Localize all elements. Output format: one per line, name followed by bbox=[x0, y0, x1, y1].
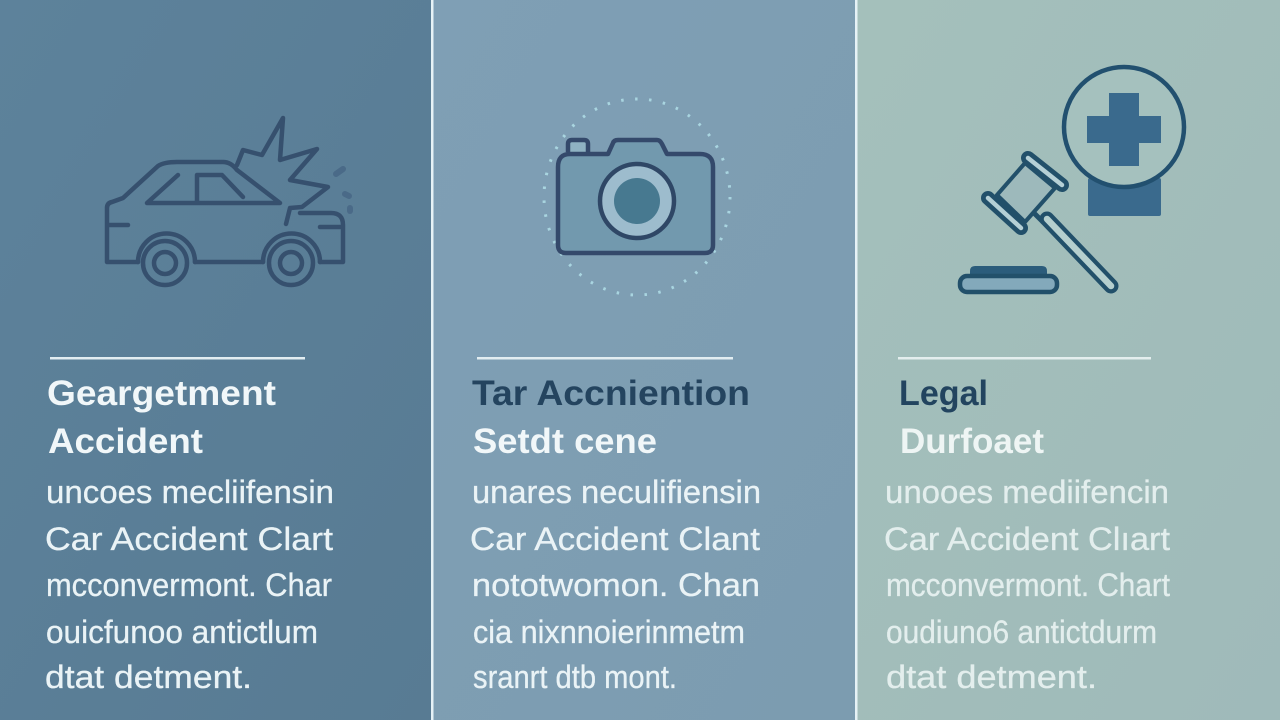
rule bbox=[477, 357, 733, 360]
body text: car accident: mcconvermont. Char bbox=[46, 567, 332, 603]
icon: camera bbox=[544, 99, 730, 295]
body text: accident scene: Car Accident Clant bbox=[470, 521, 760, 557]
panel: accident scene bbox=[432, 0, 856, 720]
heading: accident scene: Tar Accniention bbox=[472, 374, 750, 413]
panel dividers bbox=[431, 0, 858, 720]
body text: car accident: Car Accident Clart bbox=[45, 521, 333, 557]
body text: accident scene: cia nixnnoierinmetm bbox=[473, 614, 745, 650]
panel: legal bbox=[856, 0, 1280, 720]
body text: legal: mcconvermont. Chart bbox=[886, 567, 1170, 603]
heading: accident scene: Setdt cene bbox=[473, 422, 657, 461]
body text: accident scene: nototwomon. Chan bbox=[472, 567, 760, 603]
heading: car accident: Accident bbox=[48, 422, 203, 461]
body text: legal: Car Accident Clıart bbox=[884, 521, 1170, 557]
heading: legal: Durfoaet bbox=[900, 422, 1044, 461]
body text: legal bbox=[884, 474, 1170, 695]
panel: car accident bbox=[0, 0, 432, 720]
body text: accident scene: unares neculifiensin bbox=[472, 474, 761, 510]
body text: legal: unooes mediifencin bbox=[885, 474, 1169, 510]
heading: accident scene bbox=[472, 374, 750, 461]
body text: car accident: uncoes mecliifensin bbox=[46, 474, 334, 510]
body text: accident scene bbox=[470, 474, 761, 695]
body text: car accident: ouicfunoo antictlum bbox=[46, 614, 318, 650]
body text: car accident: dtat detment. bbox=[45, 659, 252, 695]
icon: gavel and medical cross bbox=[960, 67, 1184, 292]
heading: car accident: Geargetment bbox=[47, 374, 276, 413]
body text: accident scene: sranrt dtb mont. bbox=[473, 659, 677, 695]
body text: car accident bbox=[45, 474, 334, 695]
heading: car accident bbox=[47, 374, 276, 461]
heading: legal bbox=[899, 374, 1044, 461]
rule bbox=[50, 357, 305, 360]
body text: legal: oudiuno6 antictdurm bbox=[886, 614, 1157, 650]
icon: crashed car bbox=[107, 118, 350, 285]
body text: legal: dtat detment. bbox=[886, 659, 1097, 695]
rule bbox=[898, 357, 1151, 360]
heading: legal: Legal bbox=[899, 374, 988, 413]
